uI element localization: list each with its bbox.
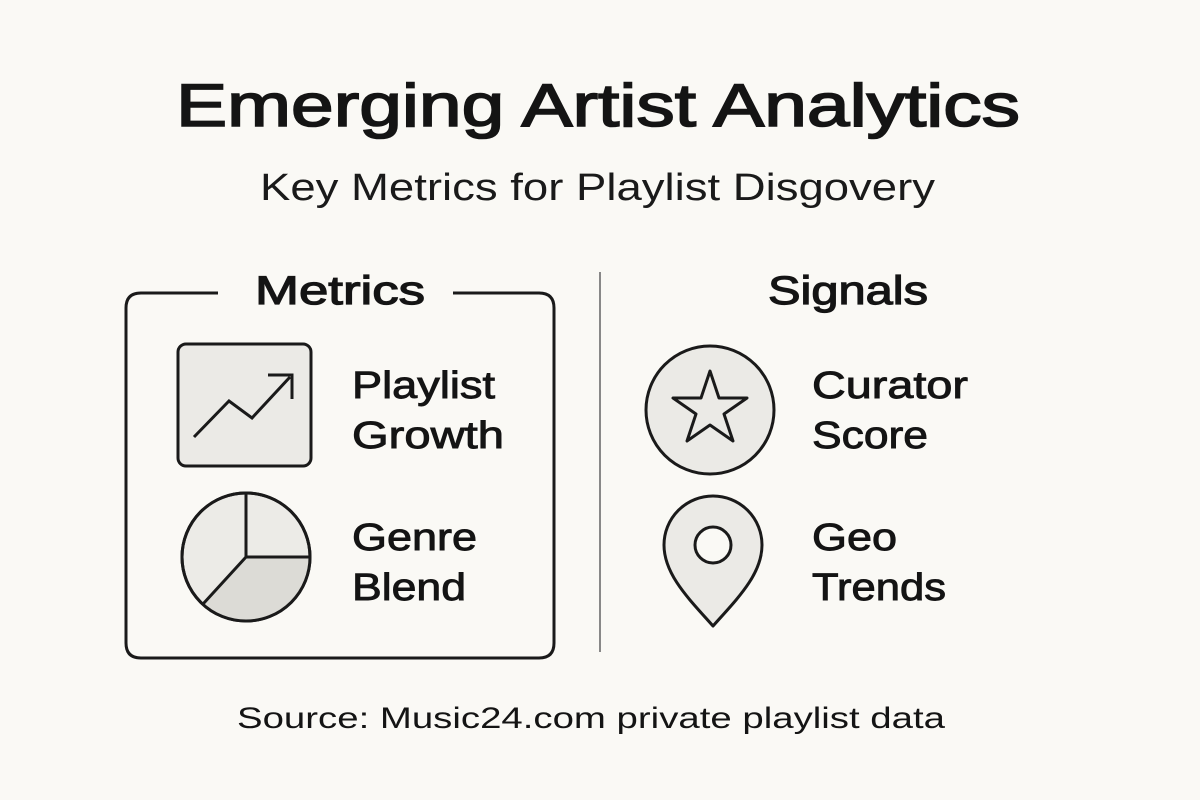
icon: growth chart: [178, 344, 311, 466]
text: curator score: Score: [812, 415, 928, 457]
divider: [599, 272, 601, 652]
icon: pie chart: [182, 493, 310, 621]
text: geo trends: [812, 517, 946, 609]
text: curator score: [812, 365, 968, 457]
text: geo trends: Geo: [812, 517, 897, 559]
icon: location pin: [664, 496, 762, 626]
text: playlist growth: Playlist: [352, 365, 496, 407]
subtitle: Key Metrics for Playlist Disgovery: [260, 167, 935, 209]
text: genre blend: [352, 517, 477, 609]
icon: star: [646, 346, 774, 474]
title: Emerging Artist Analytics: [176, 72, 1020, 139]
text: curator score: Curator: [812, 365, 968, 407]
text: genre blend: Blend: [352, 567, 466, 609]
panel: signals: [646, 269, 968, 626]
heading: signals: Signals: [768, 269, 928, 313]
source note: Source: Music24.com private playlist data: [237, 702, 945, 735]
text: playlist growth: [352, 365, 504, 457]
heading: metrics: Metrics: [255, 269, 425, 313]
text: genre blend: Genre: [352, 517, 477, 559]
text: playlist growth: Growth: [352, 415, 504, 457]
panel: metrics: [126, 269, 554, 658]
text: geo trends: Trends: [812, 567, 946, 609]
